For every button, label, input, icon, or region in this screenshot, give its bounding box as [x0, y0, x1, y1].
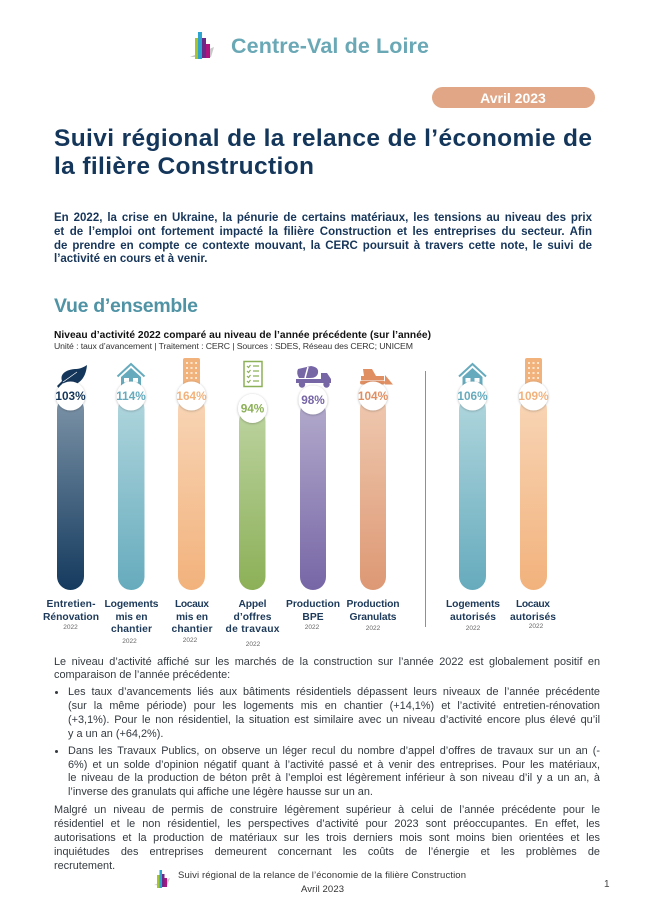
bullet: bâtiment: Les taux d’avancements liés aux bâtiments résidentiels dépassent leurs niveaux de l’année précédente [68, 686, 600, 698]
column: Logements autorisés: 106% [457, 389, 488, 403]
column: Entretien-Rénovation [43, 365, 99, 631]
column: Locaux mis en chantier: chantier [172, 624, 212, 635]
title [54, 125, 592, 180]
footer text [178, 870, 466, 895]
intro paragraph [54, 212, 592, 265]
column: Entretien-Rénovation: 103% [55, 389, 86, 403]
column: Production BPE: BPE [302, 612, 324, 623]
bullet: bâtiment: y a un an (+64,2%). [68, 728, 163, 740]
body text: introduction: Le niveau d’activité affiché sur les marchés de la construction sur l’année 2022 est globalement positif en [54, 656, 600, 668]
page number: 1 [604, 879, 610, 890]
column: Locaux mis en chantier [172, 358, 212, 644]
intro paragraph: En 2022, la crise en Ukraine, la pénurie de certains matériaux, les tensions au niveau des prix [54, 212, 592, 224]
column: Production Granulats: Granulats [350, 612, 397, 623]
column: Logements autorisés [446, 364, 500, 632]
icon: house [118, 364, 144, 386]
column: Logements autorisés: Logements [446, 599, 500, 610]
column: Production Granulats: 2022 [366, 625, 381, 632]
column: Appel d'offres de travaux: 2022 [246, 641, 261, 648]
body text: conclusion: recrutement. [54, 860, 115, 872]
column: Logements mis en chantier: 2022 [122, 638, 137, 645]
column: Appel d'offres de travaux: de travaux [226, 624, 280, 635]
bullet: travaux publics: le niveau de la production de béton prêt à l’emploi est légèrement inférieur à son niveau d’il y a un an, à [68, 772, 600, 784]
column: Production Granulats [346, 369, 400, 632]
body text: conclusion: inquiétudes des entreprises demeurent concernant les coûts de l’énergie et les problèmes de [54, 846, 600, 858]
bullet: bâtiment: (+3,1%). Pour le non résidentiel, la situation est similaire avec un niveau d’activité encore plus élevé qu’il [68, 714, 600, 726]
column: Logements autorisés: 2022 [466, 625, 481, 632]
column: Entretien-Rénovation: Rénovation [43, 612, 99, 623]
bullet: travaux publics: l’inverse des granulats qui affiche une légère hausse sur un an. [68, 786, 373, 798]
bullet: bâtiment [55, 686, 600, 740]
chart title and sources: Niveau d’activité 2022 comparé au niveau de l’année précédente (sur l’année) [54, 330, 431, 341]
column: Logements mis en chantier [104, 364, 159, 645]
header logo [190, 32, 214, 59]
intro paragraph: l’activité en cours et à venir. [54, 253, 207, 265]
column: Logements mis en chantier: Logements [104, 599, 159, 610]
chart title and sources: Unité : taux d’avancement | Traitement : CERC | Sources : SDES, Réseau des CERC; UNICEM [54, 341, 413, 351]
icon: leaf [57, 365, 87, 388]
body text: conclusion: Malgré un niveau de permis de construire légèrement supérieur à celui de l’année précédente pour le [54, 804, 600, 816]
bullet: travaux publics: Dans les Travaux Publics, on observe un léger recul du nombre d’appel d’offres de travaux sur un an (- [68, 745, 600, 757]
column: Locaux autorisés: autorisés [510, 612, 556, 623]
body text: introduction [54, 656, 600, 681]
column: Logements mis en chantier: 114% [116, 389, 146, 403]
column: Entretien-Rénovation: Entretien- [46, 599, 96, 610]
column: Locaux mis en chantier: mis en [176, 612, 208, 623]
column: Production BPE: 2022 [305, 624, 320, 631]
footer logo [154, 870, 170, 888]
column: Locaux mis en chantier: 164% [176, 389, 207, 403]
icon: office building [183, 358, 200, 388]
body text: introduction: comparaison de l’année précédente: [54, 669, 230, 681]
column: Appel d'offres de travaux [226, 362, 280, 648]
column: Logements autorisés: autorisés [450, 612, 496, 623]
column: Production Granulats: 104% [358, 389, 389, 403]
region name: Centre-Val de Loire [231, 34, 429, 58]
footer text: Suivi régional de la relance de l’économie de la filière Construction [178, 870, 466, 881]
column: Locaux autorisés: Locaux [516, 599, 550, 610]
title: Suivi régional de la relance de l’économie de [54, 125, 592, 152]
icon: checklist [244, 362, 262, 386]
column: Production Granulats: Production [346, 599, 400, 610]
section heading: Vue d’ensemble [54, 295, 198, 317]
body text: conclusion: résidentiel et le non résidentiel, les perspectives d’activité pour 2023 sont préoccupantes. En effet, les [54, 818, 600, 830]
column: Production BPE [286, 366, 340, 631]
icon: bulldozer [360, 369, 393, 384]
icon: office building [525, 358, 542, 388]
divider [425, 371, 426, 627]
column: Entretien-Rénovation: 2022 [63, 624, 78, 631]
body text: conclusion: autorisations et la production de matériaux sur les trois derniers mois sont moins bien orientées et les [54, 832, 600, 844]
intro paragraph: et de l’emploi ont fortement impacté la filière Construction et les entreprises du secteur. Afin [54, 226, 592, 238]
date badge: Avril 2023 [480, 90, 546, 106]
column: Locaux autorisés [510, 358, 556, 630]
bullet: travaux publics [55, 745, 600, 798]
date badge [432, 87, 595, 108]
intro paragraph: de prendre en compte ce contexte mouvant, la CERC poursuit à travers cette note, le suivi de [54, 240, 592, 252]
bullet: travaux publics: 6%) et un solde d’opinion négatif quant à l’activité passé et à venir des entreprises. Pour les matériaux, [68, 759, 600, 771]
column: Logements mis en chantier: chantier [111, 624, 152, 635]
column: Production BPE: 98% [301, 393, 325, 407]
column: Logements mis en chantier: mis en [116, 612, 148, 623]
bullet: bâtiment: (sur la même période) pour les logements mis en chantier (+14,1%) et l’activité entretien-rénovation [68, 700, 600, 712]
column: Appel d'offres de travaux: 94% [241, 402, 265, 416]
column: Locaux autorisés: 2022 [529, 623, 544, 630]
icon: concrete mixer truck [296, 366, 331, 388]
footer text: Avril 2023 [301, 884, 344, 895]
title: la filière Construction [54, 153, 314, 180]
column: Locaux mis en chantier: Locaux [175, 599, 209, 610]
column: Production BPE: Production [286, 599, 340, 610]
column: Locaux autorisés: 109% [518, 389, 549, 403]
body text: conclusion [54, 804, 600, 872]
icon: house [459, 364, 486, 386]
column: Appel d'offres de travaux: d’offres [234, 612, 272, 623]
chart title and sources [54, 330, 431, 351]
column: Locaux mis en chantier: 2022 [183, 637, 198, 644]
column: Appel d'offres de travaux: Appel [238, 599, 267, 610]
